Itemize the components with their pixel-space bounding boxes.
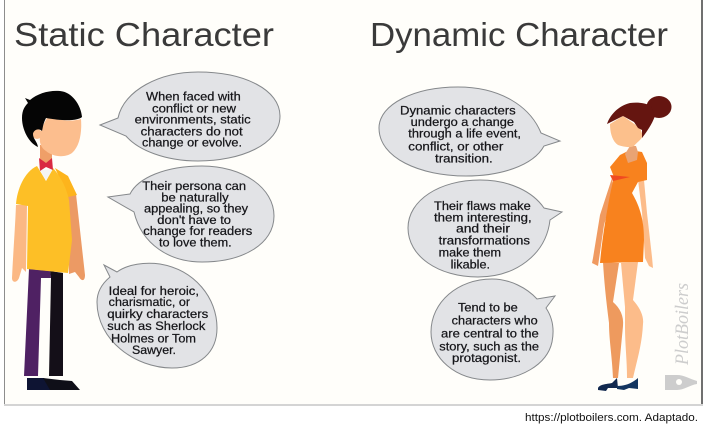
speech bubble: dynamic 1: Dynamic characters bbox=[400, 103, 516, 117]
speech bubble: static 3: such as Sherlock bbox=[107, 319, 206, 333]
speech bubble: dynamic 3 bbox=[431, 279, 555, 380]
speech bubble: dynamic 2: likable. bbox=[451, 258, 490, 272]
speech bubble: static 1: When faced with bbox=[146, 90, 241, 104]
speech bubble: dynamic 1 bbox=[379, 87, 560, 176]
speech bubble: static 2: change for readers bbox=[143, 224, 252, 238]
speech bubble: dynamic 3: are central to the bbox=[441, 327, 539, 341]
title: Static Character: Static Character bbox=[14, 16, 274, 53]
speech bubble: dynamic 1: transition. bbox=[435, 151, 493, 165]
speech bubble: static 3: Holmes or Tom bbox=[111, 331, 196, 345]
speech bubble: static 3: Sawyer. bbox=[132, 343, 176, 357]
speech bubble: dynamic 2: make them bbox=[439, 246, 501, 260]
speech bubble: static 2: don't have to bbox=[157, 213, 231, 227]
source citation: https://plotboilers.com. Adaptado. bbox=[525, 412, 698, 424]
speech bubble: static 1: change or evolve. bbox=[142, 136, 242, 150]
speech bubble: static 2: to love them. bbox=[159, 236, 232, 250]
speech bubble: static 3 bbox=[97, 263, 217, 368]
speech bubble: dynamic 1: through a life event, bbox=[408, 127, 521, 141]
speech bubble: dynamic 2: transformations bbox=[439, 234, 530, 248]
title: Dynamic Character: Dynamic Character bbox=[370, 16, 668, 53]
speech bubble: dynamic 2: and their bbox=[456, 222, 510, 236]
watermark: PlotBoilers bbox=[665, 283, 697, 390]
speech bubble: static 1 bbox=[100, 72, 280, 161]
speech bubble: static 3: charismatic, or bbox=[109, 295, 190, 309]
illustration: static male character bbox=[12, 91, 85, 390]
speech bubble: dynamic 3: story, such as the bbox=[439, 340, 539, 354]
speech bubble: dynamic 2: Their flaws make bbox=[434, 199, 531, 213]
speech bubble: static 2: be naturally bbox=[161, 190, 230, 204]
speech bubble: static 2: appealing, so they bbox=[144, 202, 249, 216]
speech bubble: static 1: environments, static bbox=[135, 113, 251, 127]
speech bubble: static 3: quirky characters bbox=[107, 307, 208, 321]
speech bubble: dynamic 3: characters who bbox=[452, 313, 538, 327]
speech bubble: static 1: conflict or new bbox=[152, 102, 236, 116]
speech bubble: static 2 bbox=[108, 166, 274, 262]
speech bubble: dynamic 3: Tend to be bbox=[458, 300, 518, 314]
speech bubble: dynamic 1: conflict, or other bbox=[408, 140, 503, 154]
speech bubble: static 3: Ideal for heroic, bbox=[109, 284, 199, 298]
speech bubble: static 1: characters do not bbox=[141, 124, 243, 138]
speech bubble: static 2: Their persona can bbox=[142, 179, 246, 193]
speech bubble: dynamic 3: protagonist. bbox=[452, 351, 521, 365]
illustration: dynamic female character bbox=[592, 96, 672, 391]
speech bubble: dynamic 2: them interesting, bbox=[434, 211, 532, 225]
speech bubble: dynamic 1: undergo a change bbox=[411, 115, 514, 129]
speech bubble: dynamic 2 bbox=[408, 180, 562, 277]
watermark: PlotBoilers: PlotBoilers bbox=[672, 283, 693, 366]
